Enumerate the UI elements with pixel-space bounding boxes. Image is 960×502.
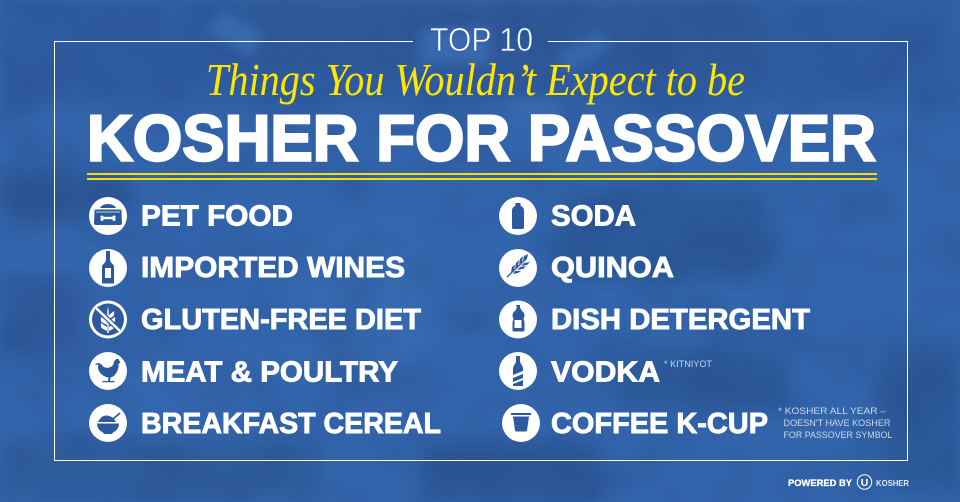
heading: script subtitle: Things You Wouldn’t Expect to be — [206, 54, 745, 105]
item: gluten-free diet: GLUTEN-FREE DIET — [141, 304, 421, 336]
icon: cereal bowl — [89, 404, 127, 442]
item: quinoa: QUINOA — [551, 252, 674, 284]
powered by ou kosher logo: U — [861, 477, 868, 489]
heading: kosher for passover: KOSHER FOR PASSOVER — [87, 102, 876, 174]
double rule — [87, 173, 877, 180]
heading: top 10: TOP 10 — [430, 21, 533, 58]
item: dish detergent: DISH DETERGENT — [551, 304, 810, 336]
icon: detergent bottle — [499, 300, 537, 338]
item: vodka: VODKA — [551, 356, 660, 388]
icon: wine bottle — [89, 249, 127, 287]
item: breakfast cereal: BREAKFAST CEREAL — [141, 408, 441, 440]
icon: pet bowl — [89, 197, 127, 235]
item: quinoa — [499, 249, 674, 287]
item: dish detergent — [499, 300, 810, 338]
item: coffee k-cup: COFFEE K-CUP — [551, 408, 768, 440]
icon: coffee pod — [502, 404, 540, 442]
item: meat and poultry — [89, 352, 398, 390]
item: imported wines — [89, 249, 405, 287]
item: pet food: PET FOOD — [141, 200, 293, 232]
powered by ou kosher logo: KOSHER — [876, 478, 909, 488]
item: soda: SODA — [551, 200, 636, 232]
icon: grain sprig — [499, 249, 537, 287]
note: kosher all year: * KOSHER ALL YEAR – — [778, 406, 887, 417]
item: soda — [499, 197, 636, 235]
note: kosher all year — [778, 406, 892, 441]
note: kosher all year: DOESN'T HAVE KOSHER — [784, 418, 891, 429]
powered by ou kosher logo: POWERED BY — [788, 478, 853, 489]
note: kosher all year: FOR PASSOVER SYMBOL — [784, 430, 892, 441]
list: left column — [89, 197, 441, 442]
item: vodka — [499, 352, 712, 390]
icon: no wheat — [89, 300, 127, 338]
item: coffee k-cup — [502, 404, 768, 442]
icon: soda bottle — [499, 197, 537, 235]
list: right column — [499, 197, 810, 442]
item: meat and poultry: MEAT & POULTRY — [141, 356, 398, 388]
note: kitniyot: * KITNIYOT — [664, 359, 712, 370]
item: imported wines: IMPORTED WINES — [141, 252, 405, 284]
powered by ou kosher logo — [788, 475, 909, 489]
item: pet food — [89, 197, 293, 235]
frame — [54, 42, 908, 460]
icon: vodka bottle — [499, 352, 537, 390]
icon: chicken — [89, 352, 127, 390]
